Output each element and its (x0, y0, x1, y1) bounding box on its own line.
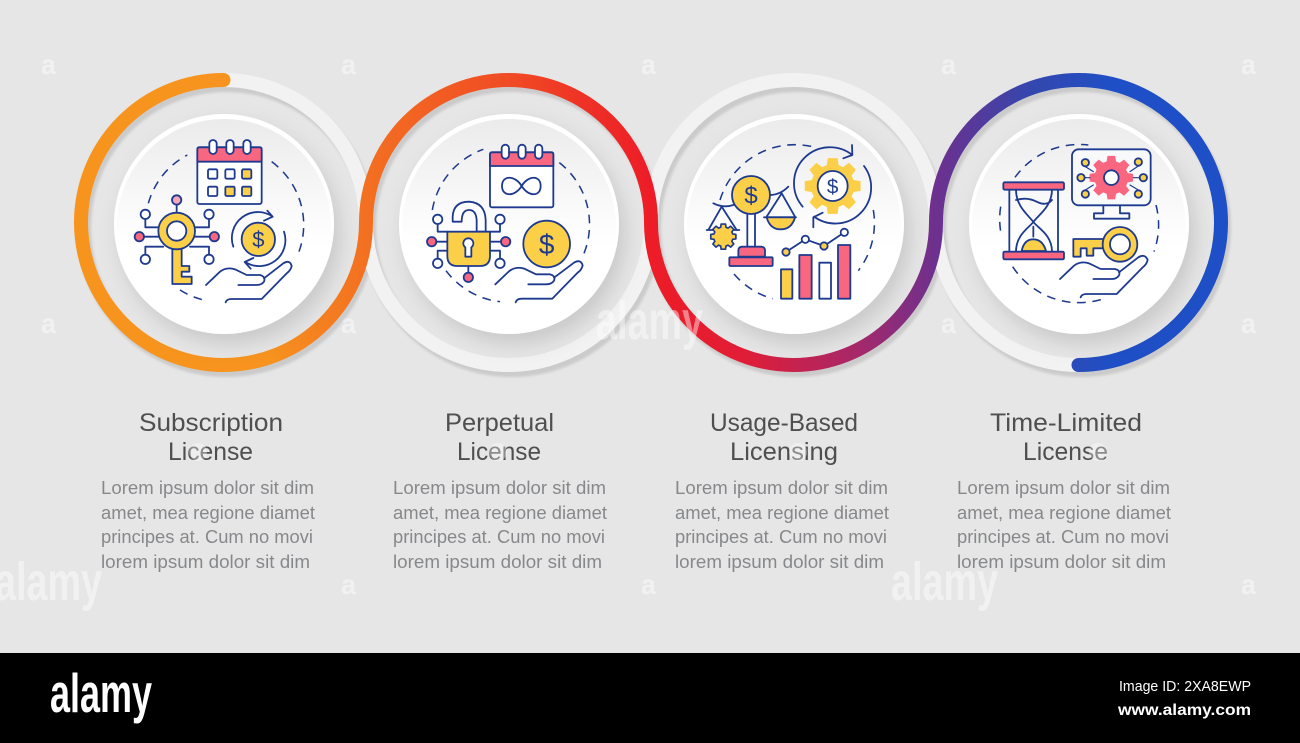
body text 2: amet, mea regione diamet (393, 503, 607, 523)
body text 2: Lorem ipsum dolor sit dim (393, 478, 606, 498)
body text 3: amet, mea regione diamet (675, 503, 889, 523)
light ring segments (224, 80, 1078, 365)
body text 1: amet, mea regione diamet (101, 503, 315, 523)
icon: hourglass, monitor gear and key (1000, 144, 1159, 303)
title: Perpetual License (445, 409, 554, 466)
watermarks (0, 49, 1256, 612)
website: www.alamy.com (1117, 702, 1251, 719)
body text 3: Lorem ipsum dolor sit dim (675, 478, 888, 498)
watermarks: a (341, 49, 356, 80)
icon: scales, gear and bar chart: $ (827, 176, 839, 199)
watermarks: alamy (891, 552, 998, 612)
body text 2 (393, 478, 607, 572)
panel: perpetual license (393, 114, 619, 572)
title: Time-Limited License: Time-Limited (990, 409, 1142, 437)
icon: scales, gear and bar chart: $ (744, 183, 758, 210)
body text 2: lorem ipsum dolor sit dim (393, 552, 602, 572)
watermarks: a (1241, 308, 1256, 339)
watermarks: alamy (596, 291, 703, 351)
title: Time-Limited License (990, 409, 1142, 466)
title: Usage-Based Licensing: Usage-Based (710, 409, 858, 437)
icon: key, calendar and recurring payment: $ (252, 227, 264, 252)
title: Subscription License (139, 409, 283, 466)
title: Subscription License: Subscription (139, 409, 283, 437)
icon: lock, infinity calendar and coin (427, 145, 590, 302)
white disc 2 (399, 114, 619, 334)
body text 1 (101, 478, 315, 572)
icon: scales, gear and bar chart (707, 145, 874, 299)
title: Time-Limited License: License (1023, 438, 1108, 466)
body text 3: lorem ipsum dolor sit dim (675, 552, 884, 572)
watermarks: a (641, 569, 656, 600)
panel: subscription license (101, 114, 334, 572)
watermarks: a (41, 308, 56, 339)
title: Subscription License: License (168, 438, 253, 466)
body text 4: Lorem ipsum dolor sit dim (957, 478, 1170, 498)
panel: time-limited license (957, 114, 1189, 572)
body text 3: principes at. Cum no movi (675, 527, 887, 547)
body text 1: lorem ipsum dolor sit dim (101, 552, 310, 572)
body text 1: principes at. Cum no movi (101, 527, 313, 547)
footer bar (0, 653, 1300, 743)
footer logo: alamy (50, 662, 152, 724)
title: Usage-Based Licensing: Licensing (730, 438, 838, 466)
gradient ribbon (81, 80, 1221, 365)
title: Perpetual License: Perpetual (445, 409, 554, 437)
body text 2: principes at. Cum no movi (393, 527, 605, 547)
body text 4 (957, 478, 1171, 572)
watermarks: a (341, 308, 356, 339)
watermarks: a (1241, 49, 1256, 80)
body text 1: Lorem ipsum dolor sit dim (101, 478, 314, 498)
title: Perpetual License: License (457, 438, 541, 466)
body text 3 (675, 478, 889, 572)
watermarks: a (341, 569, 356, 600)
watermarks: a (641, 49, 656, 80)
white disc 4 (969, 114, 1189, 334)
body text 4: principes at. Cum no movi (957, 527, 1169, 547)
ring shadows (84, 85, 1224, 370)
white disc 1 (114, 114, 334, 334)
white disc 3 (684, 114, 904, 334)
watermarks: a (41, 49, 56, 80)
watermarks: a (1241, 569, 1256, 600)
watermarks: a (941, 49, 956, 80)
watermarks: a (941, 308, 956, 339)
body text 4: amet, mea regione diamet (957, 503, 1171, 523)
panel: usage-based licensing (675, 114, 904, 572)
body text 4: lorem ipsum dolor sit dim (957, 552, 1166, 572)
image id: Image ID: 2XA8EWP (1119, 678, 1251, 695)
title: Usage-Based Licensing (710, 409, 858, 466)
icon: key, calendar and recurring payment (135, 140, 304, 302)
icon: lock, infinity calendar and coin: $ (539, 229, 555, 260)
